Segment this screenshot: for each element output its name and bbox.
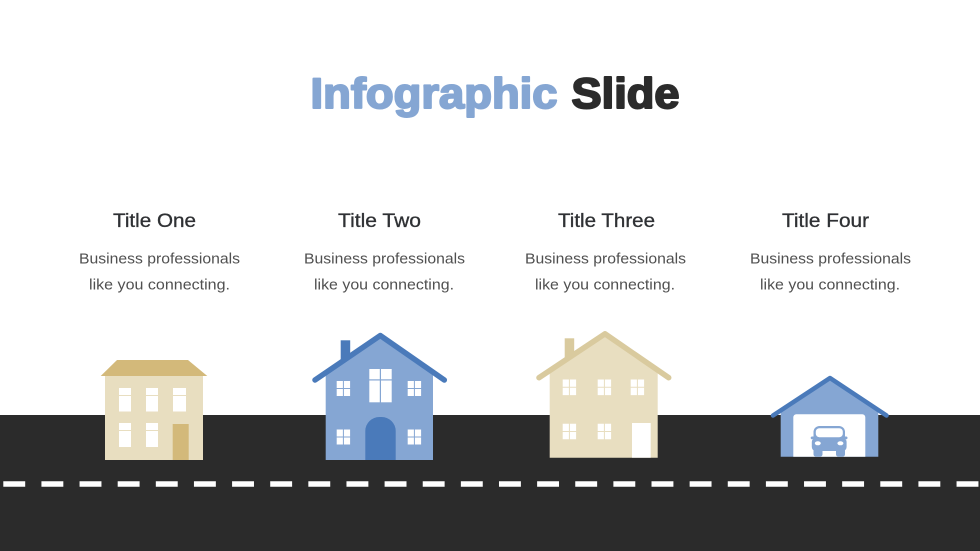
text block: title two: like you connecting.: [314, 276, 454, 294]
text block: title four: Title Four: [782, 211, 870, 232]
text block: title two: [304, 211, 465, 294]
road: [0, 415, 980, 551]
icon: garage with car: [773, 378, 886, 457]
text block: title four: Business professionals: [750, 250, 911, 268]
title: Slide: [572, 70, 680, 118]
text block: title two: Business professionals: [304, 250, 465, 268]
title: [310, 70, 680, 118]
text block: title three: Business professionals: [525, 250, 686, 268]
text block: title three: Title Three: [558, 211, 655, 232]
text block: title one: [79, 211, 240, 294]
icon: car: [811, 426, 848, 457]
icon: beige house: [539, 334, 669, 458]
text block: title four: like you connecting.: [760, 276, 900, 294]
icon: blue house: [315, 336, 444, 460]
text block: title three: like you connecting.: [535, 276, 675, 294]
title: Infographic: [310, 70, 558, 118]
text block: title three: [525, 211, 686, 294]
text block: title one: Title One: [113, 211, 196, 232]
text block: title one: Business professionals: [79, 250, 240, 268]
text block: title two: Title Two: [338, 211, 421, 232]
text block: title four: [750, 211, 911, 294]
text block: title one: like you connecting.: [89, 276, 230, 294]
icon: apartment building: [101, 360, 207, 460]
